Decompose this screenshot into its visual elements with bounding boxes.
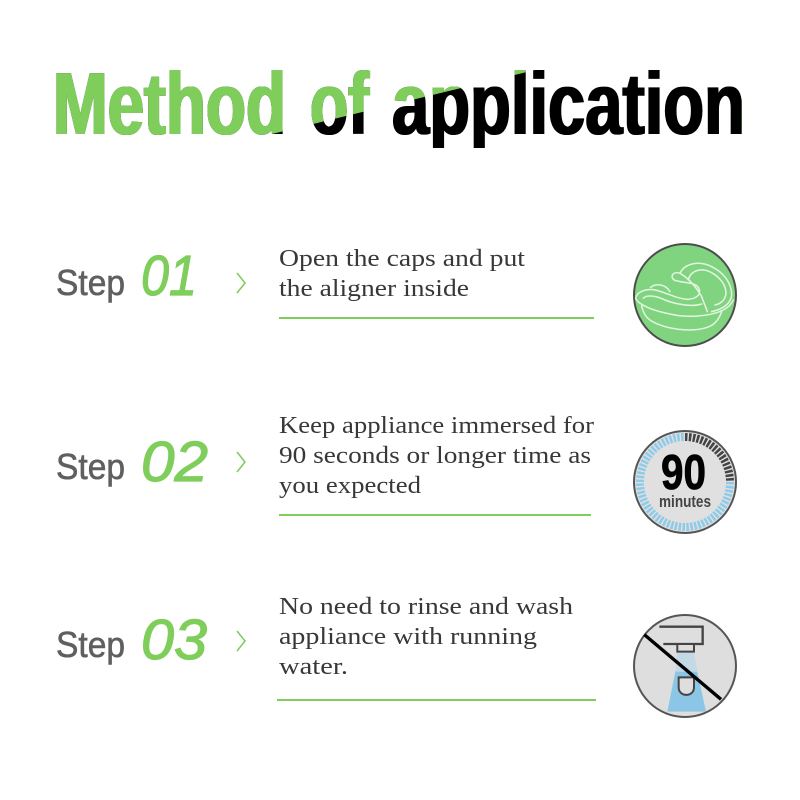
- step 02 label: Step: [56, 446, 125, 487]
- arrow: step 02 chevron: [237, 452, 245, 472]
- step 01 label: Step: [56, 262, 125, 303]
- title: Method: [53, 54, 286, 153]
- step 01 text: Open the caps and put: [279, 245, 525, 272]
- icon: no running water: [634, 615, 736, 717]
- step 03 label: 03: [141, 608, 207, 672]
- arrow: step 01 chevron: [237, 273, 245, 293]
- step 02 text: [279, 412, 594, 499]
- step 02 text: you expected: [279, 472, 421, 499]
- title: of: [310, 54, 369, 153]
- step 01 text: the aligner inside: [279, 275, 469, 302]
- step 03 text: water.: [279, 653, 348, 680]
- arrow: step 03 chevron: [237, 631, 245, 651]
- step 02 label: [56, 430, 208, 494]
- icon: aligner in case: [634, 244, 736, 346]
- step 03 text: [279, 593, 573, 680]
- step 02 text: Keep appliance immersed for: [279, 412, 594, 439]
- title: [56, 70, 742, 148]
- step 01 text: [279, 245, 525, 302]
- step 03 text: No need to rinse and wash: [279, 593, 573, 620]
- title: of: [310, 54, 369, 153]
- step 02 label: 02: [141, 430, 208, 494]
- step 01 label: 01: [141, 244, 197, 308]
- icon: 90 minutes timer: 90: [661, 446, 706, 500]
- title: Method: [53, 54, 286, 153]
- step 03 label: Step: [56, 624, 125, 665]
- step 01 label: [56, 244, 197, 308]
- step 03 text: appliance with running: [279, 623, 537, 650]
- step 02 text: 90 seconds or longer time as: [279, 442, 591, 469]
- icon: 90 minutes timer: minutes: [659, 492, 711, 511]
- step 03 label: [56, 608, 207, 672]
- icon: 90 minutes timer: [634, 431, 736, 533]
